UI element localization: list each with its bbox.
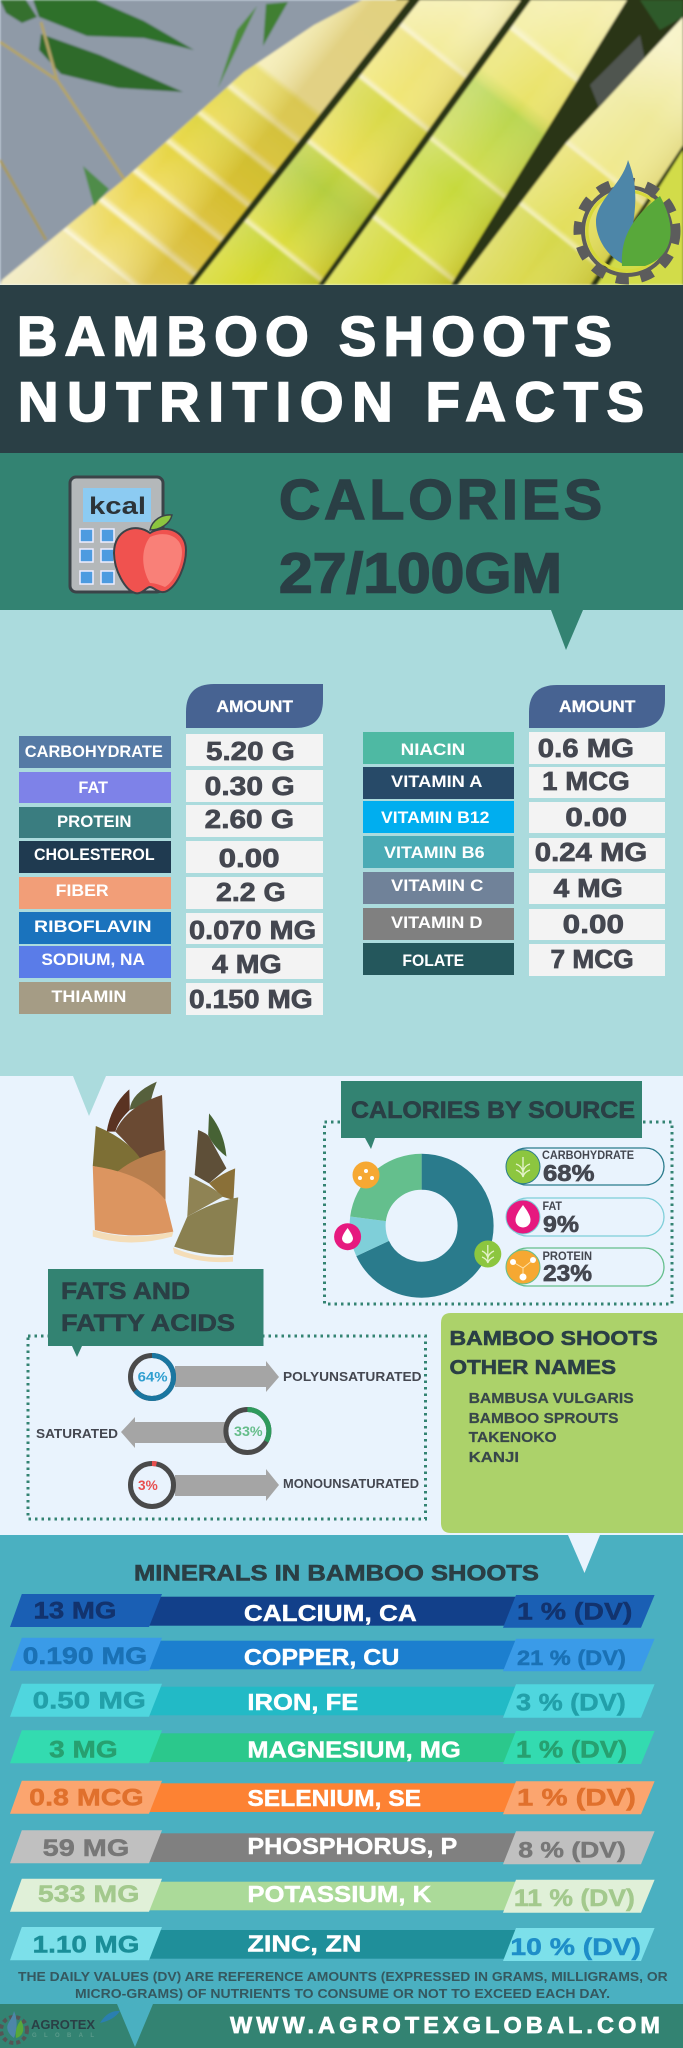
logo: gear, water drop and leaf: [578, 160, 676, 280]
nutrient labels: left column: CHOLESTEROL: [34, 845, 155, 864]
row: magnesium: 3 MG: [49, 1736, 118, 1763]
row: copper: 0.190 MG: [23, 1643, 147, 1670]
row: iron: IRON, FE: [247, 1689, 358, 1715]
icon: protein marker: [352, 1162, 380, 1188]
icon: calculator with apple: kcal: [89, 493, 146, 520]
row: calcium: [10, 1594, 655, 1628]
row: zinc: ZINC, ZN: [247, 1931, 361, 1957]
daily values note: THE DAILY VALUES (DV) ARE REFERENCE AMOUNTS (EXPRESSED IN GRAMS, MILLIGRAMS, OR: [18, 1969, 668, 1984]
nutrient amounts: left column: 4 MG: [212, 951, 282, 979]
nutrient labels: right column: VITAMIN A: [391, 772, 482, 791]
nutrient labels: left column: RIBOFLAVIN: [34, 917, 152, 936]
heading: other names: BAMBOO SHOOTS: [450, 1327, 658, 1350]
nutrient amounts: left column: 2.2 G: [216, 879, 286, 907]
nutrient amounts: right column: 4 MG: [554, 875, 623, 903]
legend: fat 9%: [506, 1198, 664, 1237]
panel: fats and fatty acids: [28, 1269, 426, 1519]
nutrient labels: left column: CARBOHYDRATE: [25, 742, 163, 761]
row: copper: 21 % (DV): [517, 1647, 626, 1670]
heading: fats and fatty acids: FATS AND: [61, 1278, 190, 1305]
legend: protein 23%: PROTEIN: [542, 1251, 592, 1263]
nutrient labels: left column: FAT: [78, 778, 109, 797]
nutrient labels: right column: [363, 732, 514, 975]
title text: BAMBOO SHOOTS: [17, 304, 612, 368]
heading: calories by source: [341, 1081, 642, 1149]
calories heading: [279, 468, 602, 606]
nutrient amounts: right column: [529, 732, 665, 976]
nutrient amounts: left column: [186, 734, 323, 1015]
panel: other names: [441, 1313, 683, 1533]
website url: WWW.AGROTEXGLOBAL.COM: [230, 2012, 660, 2038]
title text: NUTRITION FACTS: [18, 370, 644, 433]
row: phosphorus: [10, 1830, 655, 1864]
panel: calories by source: [324, 1081, 672, 1304]
logo: agrotex global: [1, 2011, 120, 2043]
row: magnesium: [10, 1730, 655, 1764]
nutrient amounts: right column: 7 MCG: [550, 946, 634, 974]
row: monounsaturated 3%: 3%: [138, 1477, 158, 1493]
row: monounsaturated 3%: [130, 1464, 419, 1506]
nutrient labels: right column: VITAMIN B6: [384, 843, 485, 862]
list: other names: KANJI: [469, 1449, 519, 1466]
nutrient amounts: right column: 0.00: [565, 804, 627, 832]
row: calcium: 1 % (DV): [517, 1598, 632, 1625]
row: zinc: 10 % (DV): [510, 1934, 641, 1961]
nutrient labels: right column: VITAMIN D: [391, 913, 482, 932]
nutrient amounts: right column: 0.6 MG: [538, 735, 634, 763]
list: other names: BAMBUSA VULGARIS: [469, 1390, 634, 1407]
panel: minerals: [0, 1535, 683, 2005]
legend: protein 23%: [506, 1248, 664, 1286]
row: iron: [10, 1684, 655, 1718]
nutrient amounts: right column: 1 MCG: [542, 768, 630, 796]
row: copper: [10, 1638, 655, 1671]
dotted frame: [28, 1336, 426, 1519]
row: magnesium: MAGNESIUM, MG: [247, 1736, 461, 1762]
row: selenium: [10, 1781, 655, 1814]
row: iron: 3 % (DV): [516, 1690, 626, 1717]
header: amount right: AMOUNT: [559, 697, 636, 716]
legend: carbohydrate 68%: 68%: [543, 1160, 594, 1186]
row: monounsaturated 3%: MONOUNSATURATED: [283, 1477, 419, 1491]
nutrient labels: right column: FOLATE: [402, 951, 464, 970]
daily values note: MICRO-GRAMS) OF NUTRIENTS TO CONSUME OR NOT TO EXCEED EACH DAY.: [75, 1986, 610, 2001]
header: amount right: [529, 685, 665, 728]
list: other names: TAKENOKO: [469, 1429, 557, 1446]
row: zinc: [10, 1927, 655, 1961]
panel: calories: [0, 453, 683, 610]
row: polyunsaturated 64%: [130, 1356, 422, 1398]
photo: peeled bamboo shoots with leaves: [0, 0, 683, 285]
heading: fats and fatty acids: [48, 1269, 264, 1357]
row: calcium: CALCIUM, CA: [244, 1600, 417, 1626]
legend: fat 9%: 9%: [543, 1211, 579, 1237]
header: amount left: [186, 684, 323, 728]
row: potassium: [10, 1879, 655, 1913]
row: saturated 33%: SATURATED: [36, 1427, 118, 1441]
pointer: minerals tail: [117, 2004, 153, 2047]
logo: agrotex global: GLOBAL: [32, 2033, 94, 2039]
row: saturated 33%: 33%: [234, 1423, 263, 1439]
logo: agrotex global: AGROTEX: [31, 2017, 95, 2032]
row: magnesium: 1 % (DV): [516, 1736, 627, 1763]
nutrient amounts: left column: 2.60 G: [205, 806, 294, 834]
row: selenium: 1 % (DV): [517, 1785, 636, 1812]
nutrient labels: left column: [19, 736, 171, 1014]
nutrient amounts: left column: 0.070 MG: [189, 917, 316, 945]
row: selenium: SELENIUM, SE: [247, 1785, 421, 1811]
heading: other names: OTHER NAMES: [450, 1356, 616, 1379]
row: phosphorus: 59 MG: [43, 1835, 129, 1862]
illustration: bamboo shoots: [93, 1082, 238, 1262]
row: saturated 33%: [36, 1410, 269, 1452]
legend: protein 23%: 23%: [543, 1260, 592, 1286]
nutrient amounts: left column: 5.20 G: [206, 738, 295, 766]
nutrient amounts: left column: 0.150 MG: [189, 986, 313, 1014]
daily values note: [18, 1969, 668, 2001]
nutrient amounts: left column: 0.30 G: [205, 773, 295, 801]
legend: carbohydrate 68%: [506, 1148, 664, 1186]
list: other names: [469, 1390, 634, 1466]
heading: minerals: MINERALS IN BAMBOO SHOOTS: [134, 1561, 539, 1586]
row: potassium: 533 MG: [38, 1881, 139, 1908]
nutrient labels: right column: VITAMIN B12: [381, 808, 490, 827]
pointer: nutrient panel tail: [73, 1076, 106, 1116]
icon: fat marker: [334, 1223, 361, 1250]
nutrient labels: left column: SODIUM, NA: [41, 950, 145, 969]
header: amount left: AMOUNT: [216, 697, 294, 716]
legend: fat 9%: FAT: [542, 1201, 562, 1213]
row: phosphorus: PHOSPHORUS, P: [247, 1833, 457, 1859]
row: potassium: 11 % (DV): [514, 1885, 635, 1912]
calories heading: 27/100GM: [279, 542, 562, 606]
row: polyunsaturated 64%: POLYUNSATURATED: [283, 1370, 422, 1384]
nutrient amounts: right column: 0.24 MG: [535, 839, 647, 867]
heading: other names: [450, 1327, 658, 1379]
nutrient labels: left column: FIBER: [56, 881, 109, 900]
footer band: [0, 2004, 683, 2048]
nutrient labels: right column: NIACIN: [401, 740, 465, 759]
legend: carbohydrate 68%: CARBOHYDRATE: [542, 1150, 634, 1162]
row: phosphorus: 8 % (DV): [518, 1837, 626, 1862]
row: potassium: POTASSIUM, K: [247, 1881, 432, 1907]
title text: [17, 304, 644, 433]
list: other names: BAMBOO SPROUTS: [469, 1410, 618, 1427]
pointer: calories callout tail: [551, 610, 583, 650]
row: zinc: 1.10 MG: [33, 1932, 139, 1959]
pointer: other names tail: [568, 1535, 600, 1573]
nutrient amounts: left column: 0.00: [219, 845, 280, 873]
icon: calculator with apple: [70, 477, 186, 593]
row: calcium: 13 MG: [34, 1597, 116, 1624]
icon: carbohydrate marker: [474, 1240, 501, 1268]
donut chart: [368, 1172, 476, 1280]
row: polyunsaturated 64%: 64%: [138, 1368, 168, 1384]
heading: fats and fatty acids: FATTY ACIDS: [61, 1310, 235, 1337]
row: copper: COPPER, CU: [244, 1644, 399, 1670]
nutrient amounts: right column: 0.00: [563, 911, 624, 939]
title band: [0, 285, 683, 453]
row: selenium: 0.8 MCG: [29, 1785, 144, 1812]
calories heading: CALORIES: [279, 468, 602, 532]
row: iron: 0.50 MG: [33, 1687, 146, 1714]
nutrient labels: right column: VITAMIN C: [391, 876, 483, 895]
heading: calories by source: CALORIES BY SOURCE: [351, 1097, 635, 1124]
panel: nutrient tables: [0, 610, 683, 1076]
nutrient labels: left column: THIAMIN: [51, 987, 126, 1006]
dotted frame: [324, 1122, 672, 1304]
nutrient labels: left column: PROTEIN: [57, 812, 132, 831]
